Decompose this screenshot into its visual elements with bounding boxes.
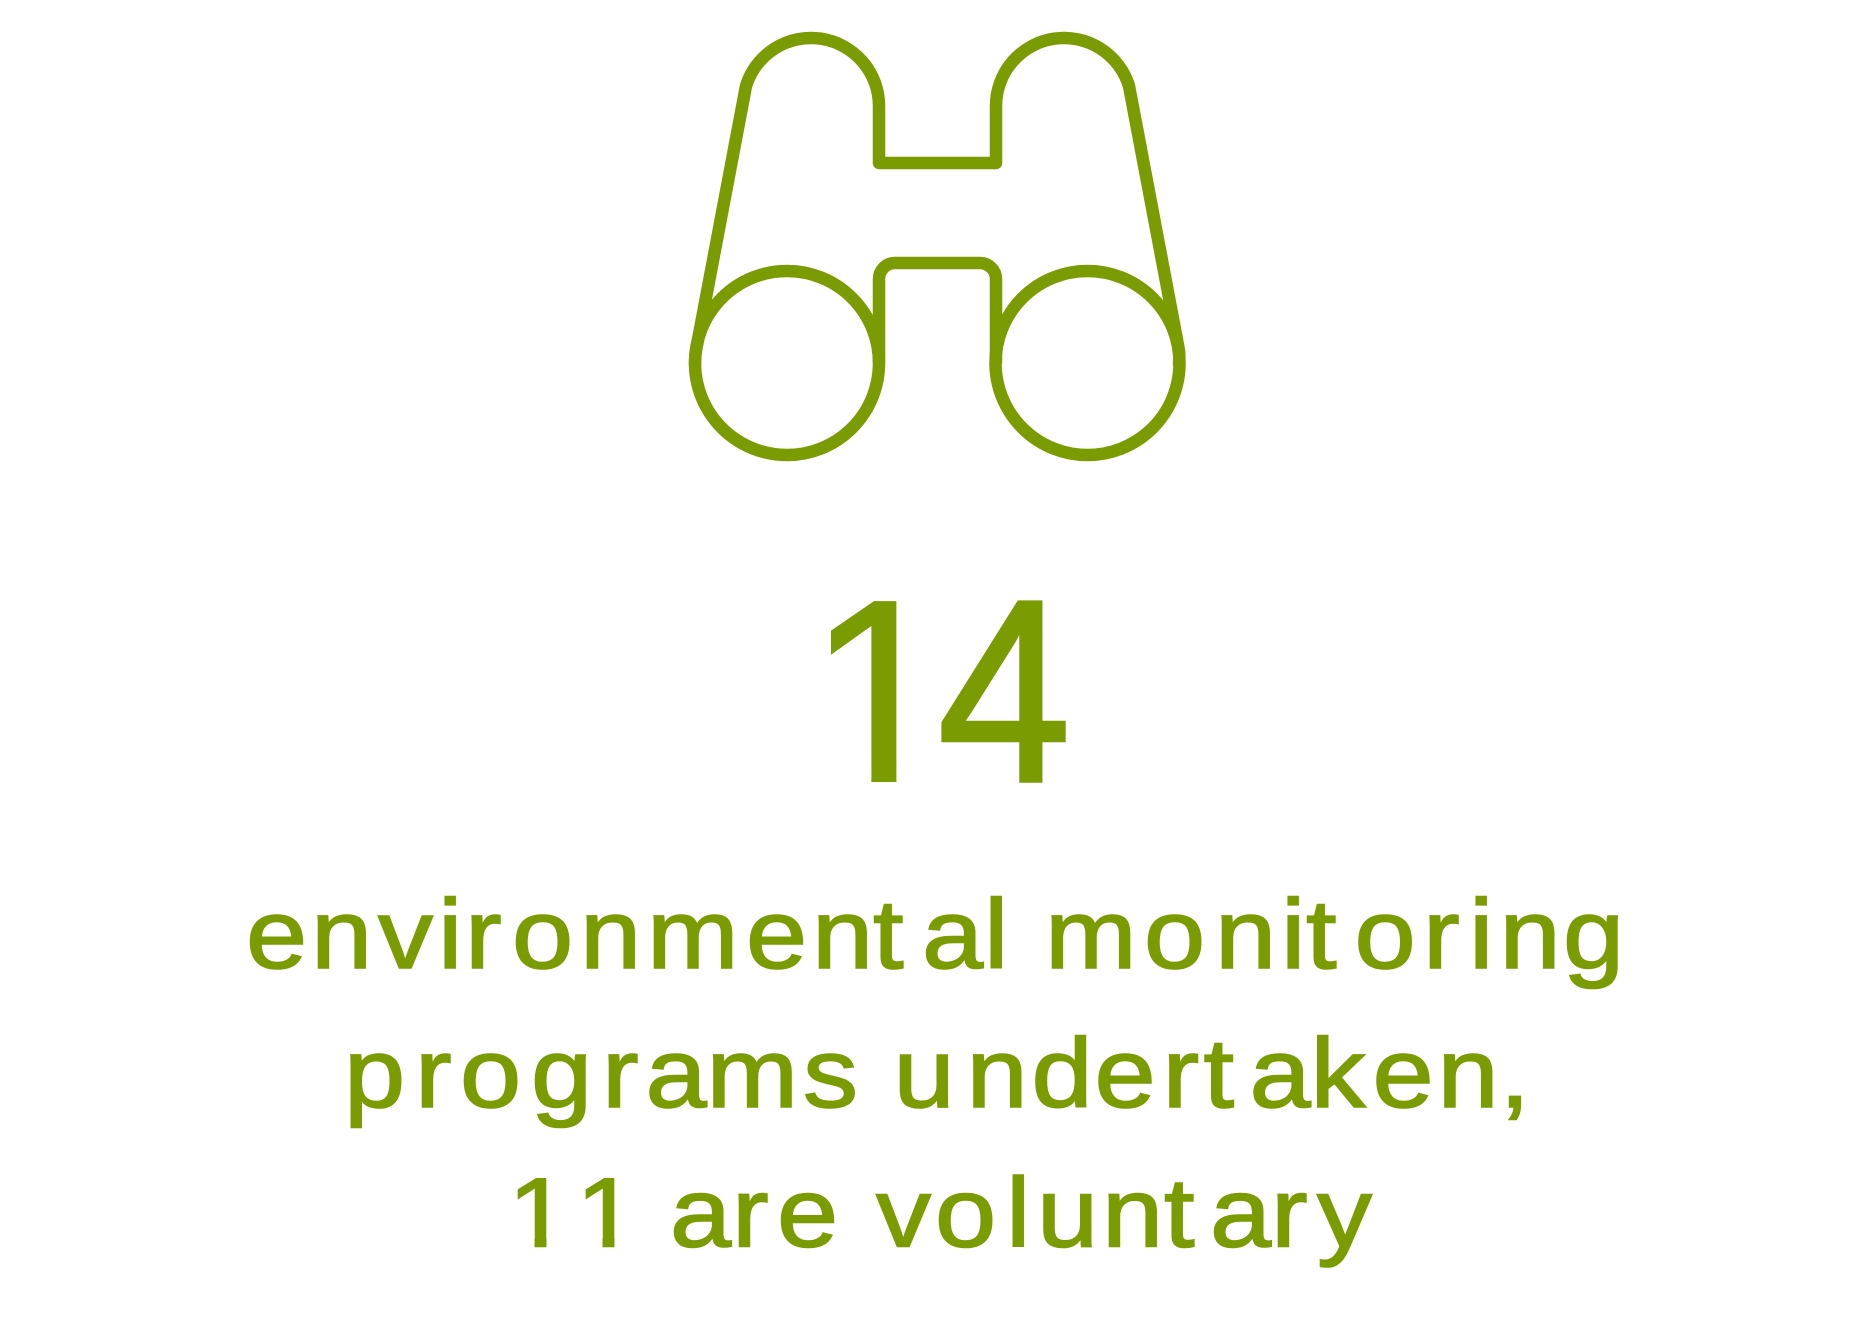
big number: 14 bbox=[831, 600, 1066, 783]
big number: 14: 1 bbox=[807, 547, 952, 837]
line 2: programs undertaken, bbox=[344, 1020, 1530, 1129]
line 3: 11 are voluntary: 11 bbox=[508, 1159, 637, 1268]
line 1: environmental monitoring bbox=[246, 881, 1624, 990]
line 1: environmental monitoring: monitoring bbox=[1045, 881, 1624, 990]
line 3: 11 are voluntary bbox=[518, 1174, 1374, 1268]
line 2: programs undertaken,: undertaken, bbox=[894, 1020, 1530, 1129]
line 1: environmental monitoring: environmental bbox=[246, 881, 1008, 990]
line 2: programs undertaken,: programs bbox=[344, 1020, 858, 1129]
line 3: 11 are voluntary: voluntary bbox=[876, 1159, 1372, 1268]
infographic bbox=[250, 32, 1618, 1268]
description text bbox=[246, 881, 1624, 1268]
big number: 14: 4 bbox=[938, 546, 1071, 837]
icon: binoculars bbox=[695, 38, 1180, 455]
line 3: 11 are voluntary: are bbox=[670, 1159, 838, 1268]
